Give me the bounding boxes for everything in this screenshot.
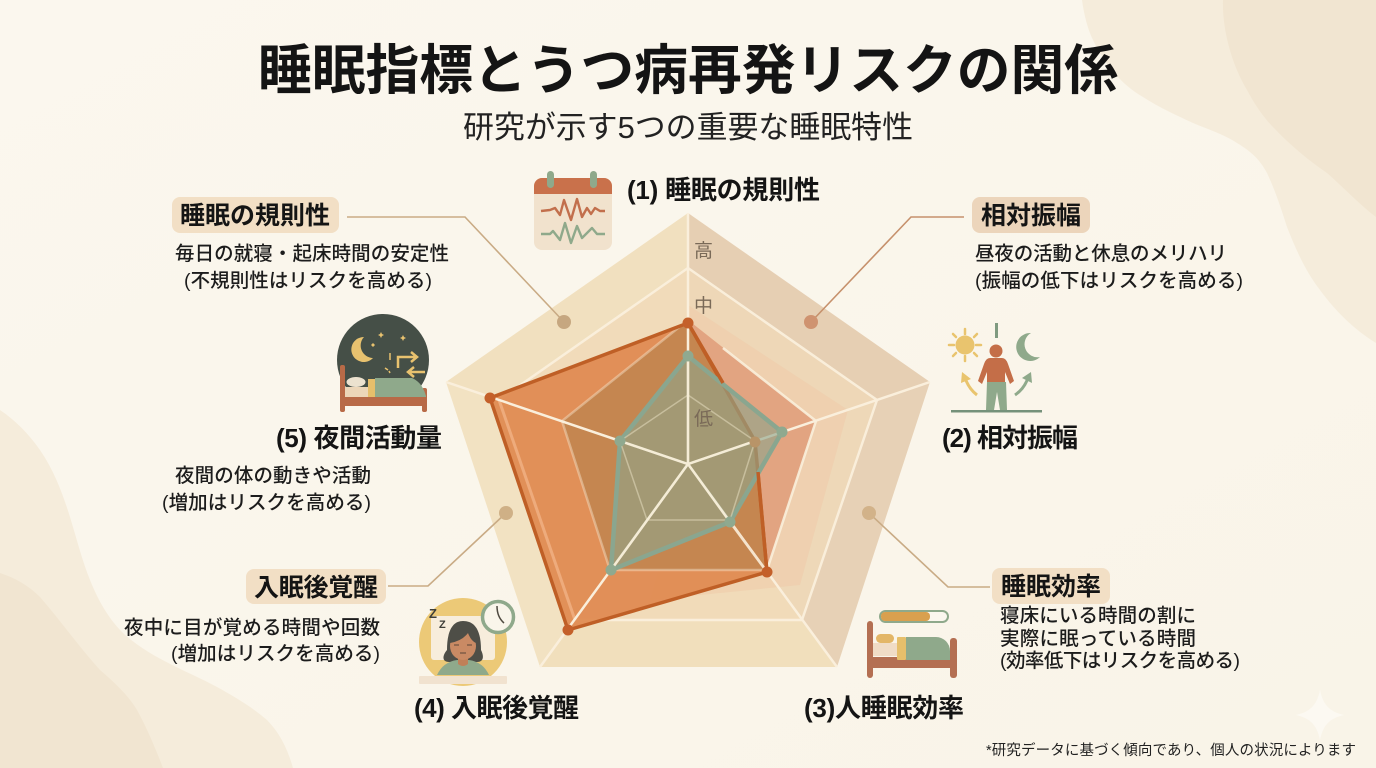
callout: sleep regularity — [172, 197, 571, 329]
icon: bed with progress bar — [867, 611, 957, 678]
callout: sleep efficiency: 睡眠効率 — [1001, 573, 1101, 601]
inner darker overlap band — [562, 320, 767, 570]
callout: relative amplitude — [804, 197, 1243, 329]
callout: sleep regularity: 毎日の就寝・起床時間の安定性 — [175, 243, 449, 265]
callout: sleep regularity: 睡眠の規則性 — [180, 202, 330, 230]
orange outline — [490, 323, 767, 630]
icon: night bed — [337, 314, 429, 412]
radar: low-risk green profile — [611, 356, 782, 570]
callout: wake after sleep onset: 夜中に目が覚める時間や回数 — [124, 617, 380, 639]
scale labels — [694, 240, 713, 430]
icon: sparkle watermark — [1296, 690, 1344, 740]
scale labels: 中 — [694, 295, 713, 317]
callout: relative amplitude: 昼夜の活動と休息のメリハリ — [975, 243, 1227, 265]
text block: night activity: (増加はリスクを高める) — [162, 492, 371, 514]
axis label 3: (3)人睡眠効率 — [804, 693, 964, 723]
data points — [484, 318, 788, 636]
background blob: bottom left — [0, 410, 293, 768]
icon: sleeper with clock: Z — [439, 619, 446, 631]
text block: night activity: 夜間の体の動きや活動 — [175, 465, 371, 487]
scale labels: 高 — [694, 240, 713, 262]
callout: sleep efficiency — [862, 506, 1240, 672]
callout: sleep efficiency: 実際に眠っている時間 — [1000, 628, 1196, 650]
callout: relative amplitude: (振幅の低下はリスクを高める) — [975, 270, 1243, 292]
axis label 5: (5) 夜間活動量 — [276, 423, 442, 453]
axis label 2: (2) 相対振幅 — [942, 423, 1078, 453]
callout: sleep efficiency: (効率低下はリスクを高める) — [1000, 650, 1240, 672]
callout: relative amplitude: 相対振幅 — [981, 202, 1081, 230]
callout: wake after sleep onset — [124, 506, 513, 665]
axis label 4: (4) 入眠後覚醒 — [414, 693, 579, 723]
radar chart — [446, 213, 930, 667]
background blob: top right — [1082, 0, 1376, 343]
radar grid: middle ring — [499, 268, 877, 620]
radar: high-risk orange profile — [490, 323, 767, 630]
callout: wake after sleep onset: (増加はリスクを高める) — [171, 643, 380, 665]
footnote: *研究データに基づく傾向であり、個人の状況によります — [986, 741, 1356, 759]
scale labels: 低 — [694, 408, 713, 430]
text block: night activity — [162, 465, 371, 514]
icon: person between sun and moon — [949, 323, 1042, 412]
axis label 1: (1) 睡眠の規則性 — [627, 175, 820, 205]
icon: sleeper with clock: Z — [429, 606, 437, 621]
callout: sleep efficiency: 寝床にいる時間の割に — [1000, 605, 1196, 627]
callout: wake after sleep onset: 入眠後覚醒 — [254, 574, 378, 602]
radar grid: outer sectors — [446, 213, 930, 667]
inner grid on green — [620, 395, 755, 520]
icon: calendar — [534, 171, 612, 250]
icon: sleeper with clock — [419, 598, 514, 686]
title: 睡眠指標とうつ病再発リスクの関係 — [258, 41, 1118, 101]
subtitle: 研究が示す5つの重要な睡眠特性 — [463, 110, 913, 145]
callout: sleep regularity: (不規則性はリスクを高める) — [184, 270, 432, 292]
radar grid lines — [446, 213, 930, 667]
